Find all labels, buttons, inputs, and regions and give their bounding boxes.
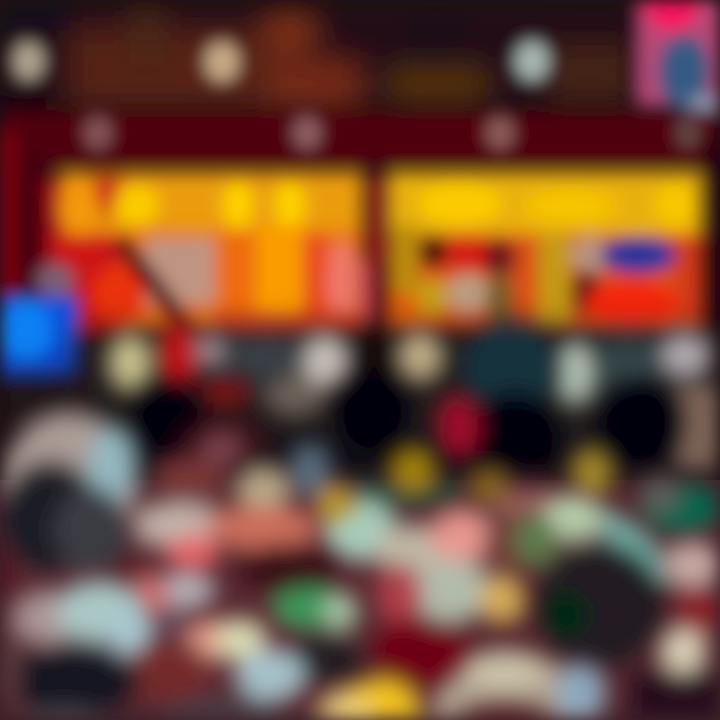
left screen	[44, 172, 362, 335]
crowd right side	[324, 448, 720, 720]
banner top right	[638, 0, 720, 116]
ceiling lights upper row	[11, 40, 550, 83]
side curtains	[0, 130, 720, 340]
foreground head right with teal arc	[511, 496, 666, 667]
blue screen and figure above	[0, 263, 78, 378]
centre pillar	[358, 175, 386, 332]
upper wall	[0, 0, 720, 125]
foreground heads left	[0, 412, 152, 720]
crowd far right	[630, 543, 720, 720]
crowd base	[0, 423, 720, 720]
dark silhouettes	[132, 335, 682, 475]
foreground head bottom right	[431, 652, 604, 720]
crowd centre left	[88, 432, 376, 720]
ceiling lights lower row	[83, 115, 701, 151]
lower background fill	[0, 480, 720, 720]
right screen	[388, 172, 702, 330]
stage performers and speakers	[110, 321, 720, 470]
dark red band	[0, 112, 720, 166]
presenter in blue	[462, 318, 558, 418]
stage area	[0, 332, 720, 480]
